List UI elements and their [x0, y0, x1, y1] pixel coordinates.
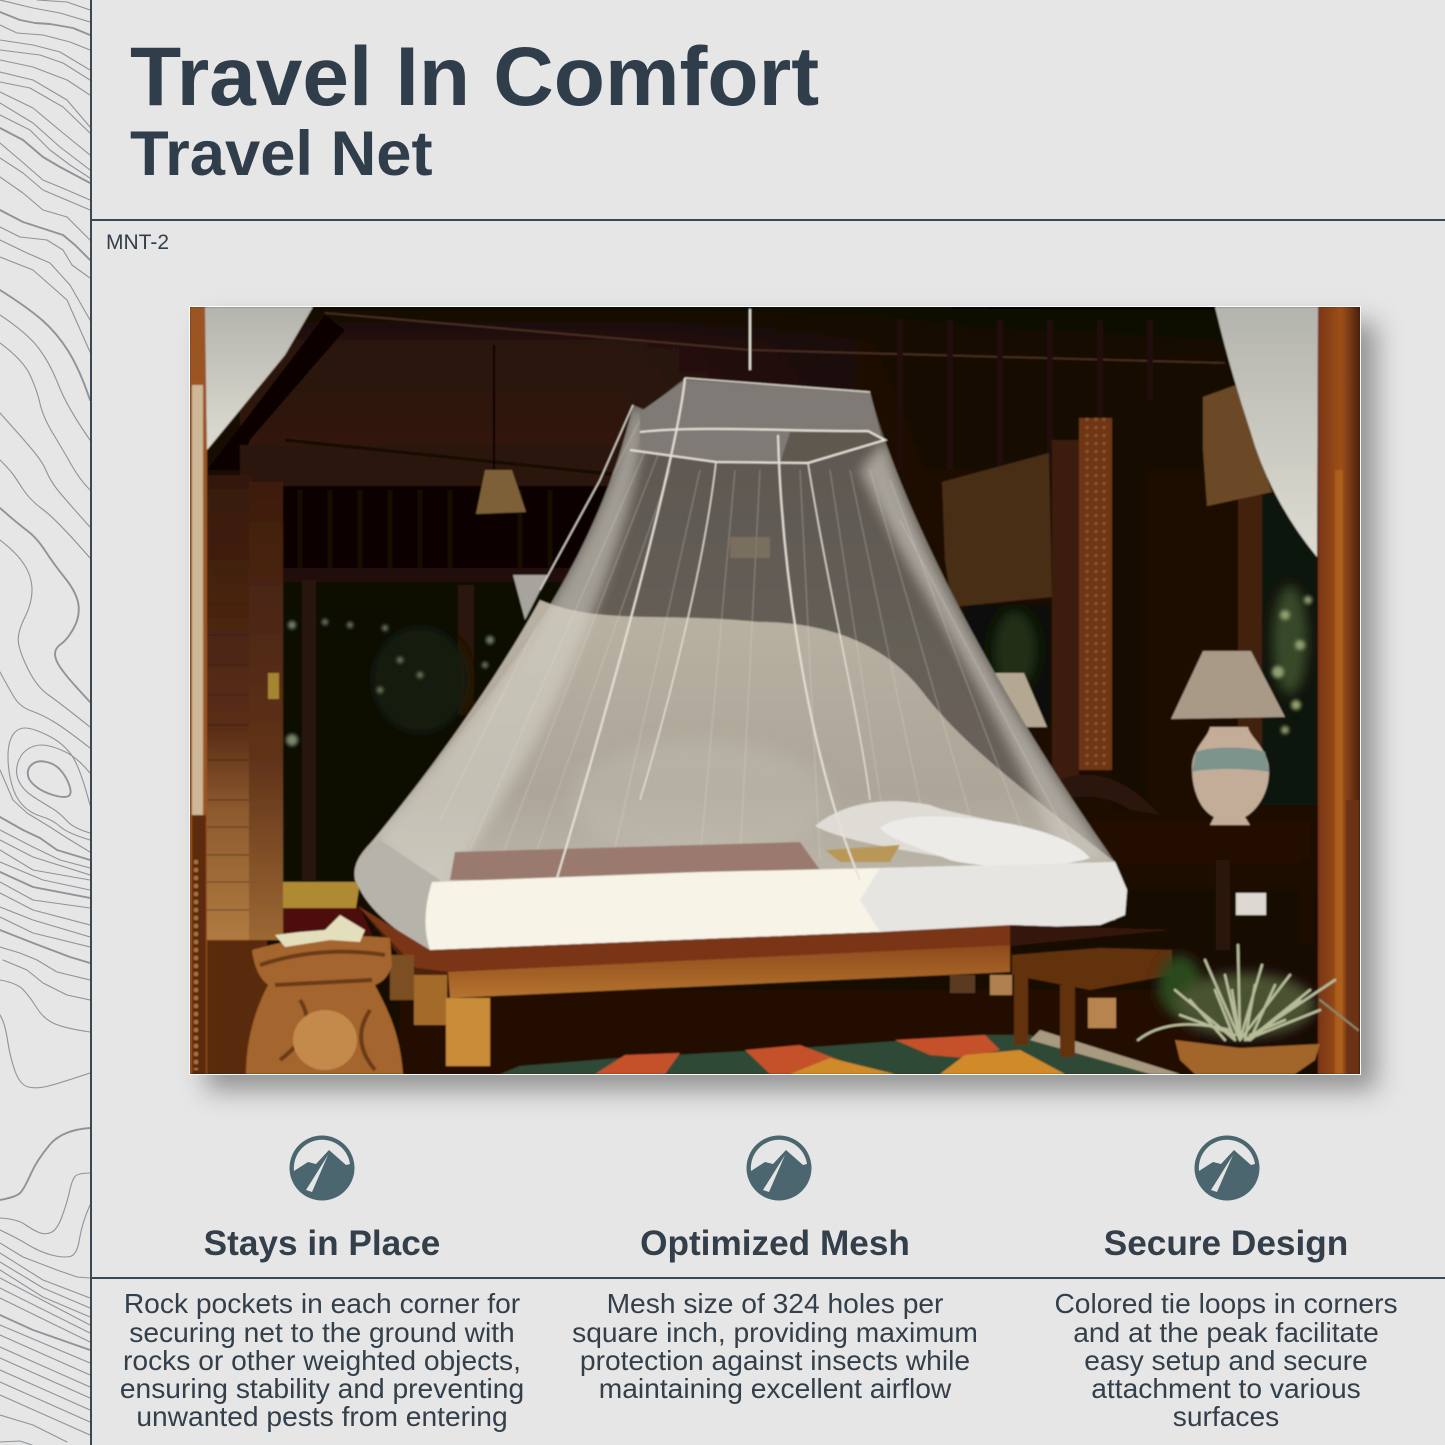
feature text: stays in place: unwanted pests from entering — [136, 1400, 508, 1432]
table lamp right — [1171, 651, 1285, 825]
feature text: stays in place — [120, 1287, 524, 1432]
bedding: blanket and pillows — [450, 801, 1090, 880]
elephant side table — [246, 936, 403, 1074]
feature text: stays in place: rocks or other weighted objects, — [123, 1344, 521, 1376]
hanging lamp — [476, 345, 526, 514]
topographic contour sidebar — [0, 0, 90, 1445]
feature heading: optimized mesh: Optimized Mesh — [640, 1224, 910, 1263]
feature text: optimized mesh: maintaining excellent airflow — [599, 1372, 951, 1404]
rug — [500, 1035, 1150, 1074]
feature text: optimized mesh: Mesh size of 324 holes per — [607, 1287, 943, 1319]
carved bamboo panel — [1079, 418, 1112, 770]
room background — [180, 300, 1370, 1080]
plant — [1138, 945, 1358, 1040]
feature text: optimized mesh — [572, 1287, 978, 1404]
feature text: secure design — [1054, 1287, 1398, 1432]
feature text: secure design: attachment to various — [1091, 1372, 1361, 1404]
feature text: secure design: and at the peak facilitate — [1073, 1316, 1379, 1348]
subtitle: Travel Net — [130, 118, 433, 188]
side table — [1060, 775, 1314, 950]
bed frame — [358, 906, 1168, 1066]
lower rule — [92, 1277, 1445, 1279]
left wood wall and door frame — [207, 475, 283, 1074]
title: Travel In Comfort — [130, 29, 819, 123]
woven blind left — [942, 453, 1052, 607]
flowers on side table — [275, 915, 365, 947]
right foliage window — [1262, 495, 1320, 805]
feature text: optimized mesh: square inch, providing maximum — [572, 1316, 978, 1348]
sidebar vertical rule — [90, 0, 92, 1445]
mosquito net — [355, 378, 1127, 950]
right wood post — [1318, 307, 1360, 1074]
icon: mountain badge 2 — [746, 1136, 812, 1200]
icon: mountain badge 1 — [290, 1136, 354, 1200]
left curtain — [205, 307, 313, 450]
right wall — [880, 410, 1320, 890]
feature text: stays in place: ensuring stability and preventing — [120, 1372, 524, 1404]
product photo illustration — [190, 307, 1360, 1074]
feature heading: secure design: Secure Design — [1104, 1224, 1348, 1263]
woven blind right — [1203, 385, 1272, 506]
feature text: stays in place: securing net to the ground with — [129, 1316, 515, 1348]
floor — [400, 990, 1200, 1080]
icon: mountain badge 3 — [1194, 1136, 1260, 1200]
feature heading: stays in place: Stays in Place — [204, 1224, 440, 1263]
feature text: stays in place: Rock pockets in each corner for — [124, 1287, 520, 1319]
plant pot — [1175, 1040, 1320, 1074]
table lamp background — [988, 673, 1047, 727]
feature text: optimized mesh: protection against insects while — [580, 1344, 970, 1376]
mattress — [355, 840, 1127, 950]
floor mat fringe — [1030, 1030, 1180, 1074]
header rule — [92, 219, 1445, 221]
feature text: secure design: Colored tie loops in corners — [1054, 1287, 1398, 1319]
model code: MNT-2 — [106, 231, 169, 254]
feature text: secure design: surfaces — [1173, 1400, 1279, 1432]
left door post — [190, 307, 207, 1074]
right curtain — [1215, 307, 1318, 557]
net seams and ties — [540, 309, 885, 880]
wooden stool — [1012, 948, 1172, 1057]
feature text: secure design: easy setup and secure — [1084, 1344, 1368, 1376]
